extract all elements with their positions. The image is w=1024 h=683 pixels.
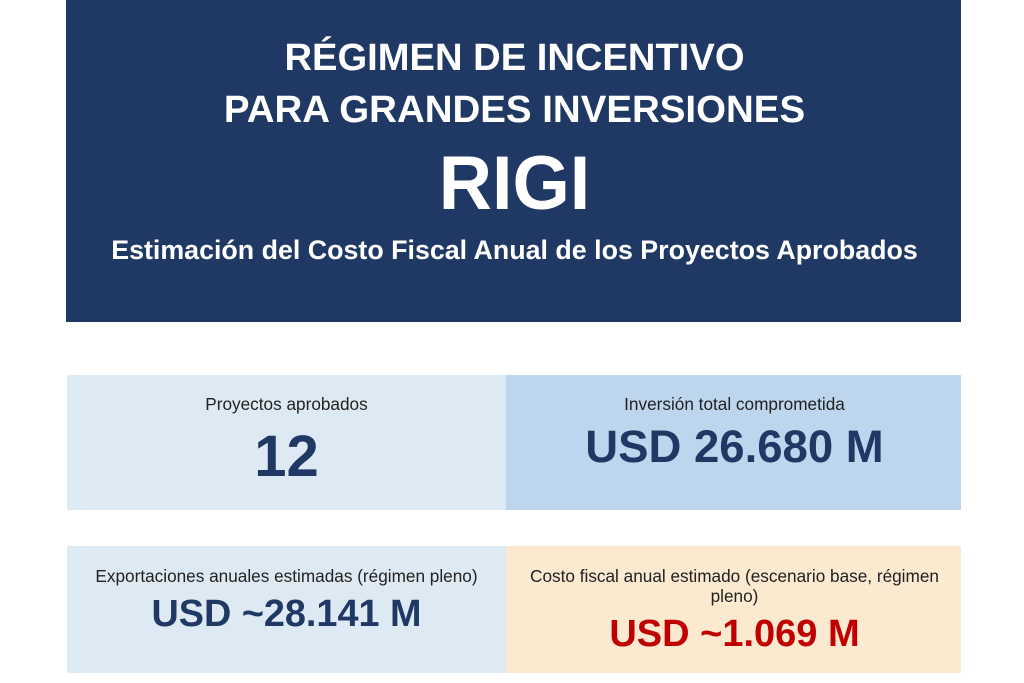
panel: exportaciones xyxy=(67,546,506,673)
label: Costo fiscal anual estimado (escenario base, régimen xyxy=(530,566,939,586)
RIGI heading: RIGI xyxy=(439,141,590,226)
value: USD ~28.141 M xyxy=(152,593,421,635)
label: Proyectos aprobados xyxy=(205,394,368,414)
label: Inversión total comprometida xyxy=(624,394,845,414)
value: USD 26.680 M xyxy=(585,421,884,472)
label: pleno) xyxy=(711,586,758,606)
title line 1: RÉGIMEN DE INCENTIVO xyxy=(285,37,744,79)
panel: costo fiscal xyxy=(506,546,961,673)
subtitle: Estimación del Costo Fiscal Anual de los Proyectos Aprobados xyxy=(111,235,918,265)
panel: inversion total xyxy=(506,375,961,510)
header banner xyxy=(66,0,961,322)
label: Exportaciones anuales estimadas (régimen pleno) xyxy=(95,566,478,586)
title line 2: PARA GRANDES INVERSIONES xyxy=(224,88,805,130)
label xyxy=(530,566,939,606)
panel: proyectos aprobados xyxy=(67,375,506,510)
value: USD ~1.069 M xyxy=(609,613,860,655)
value: 12 xyxy=(254,424,319,489)
